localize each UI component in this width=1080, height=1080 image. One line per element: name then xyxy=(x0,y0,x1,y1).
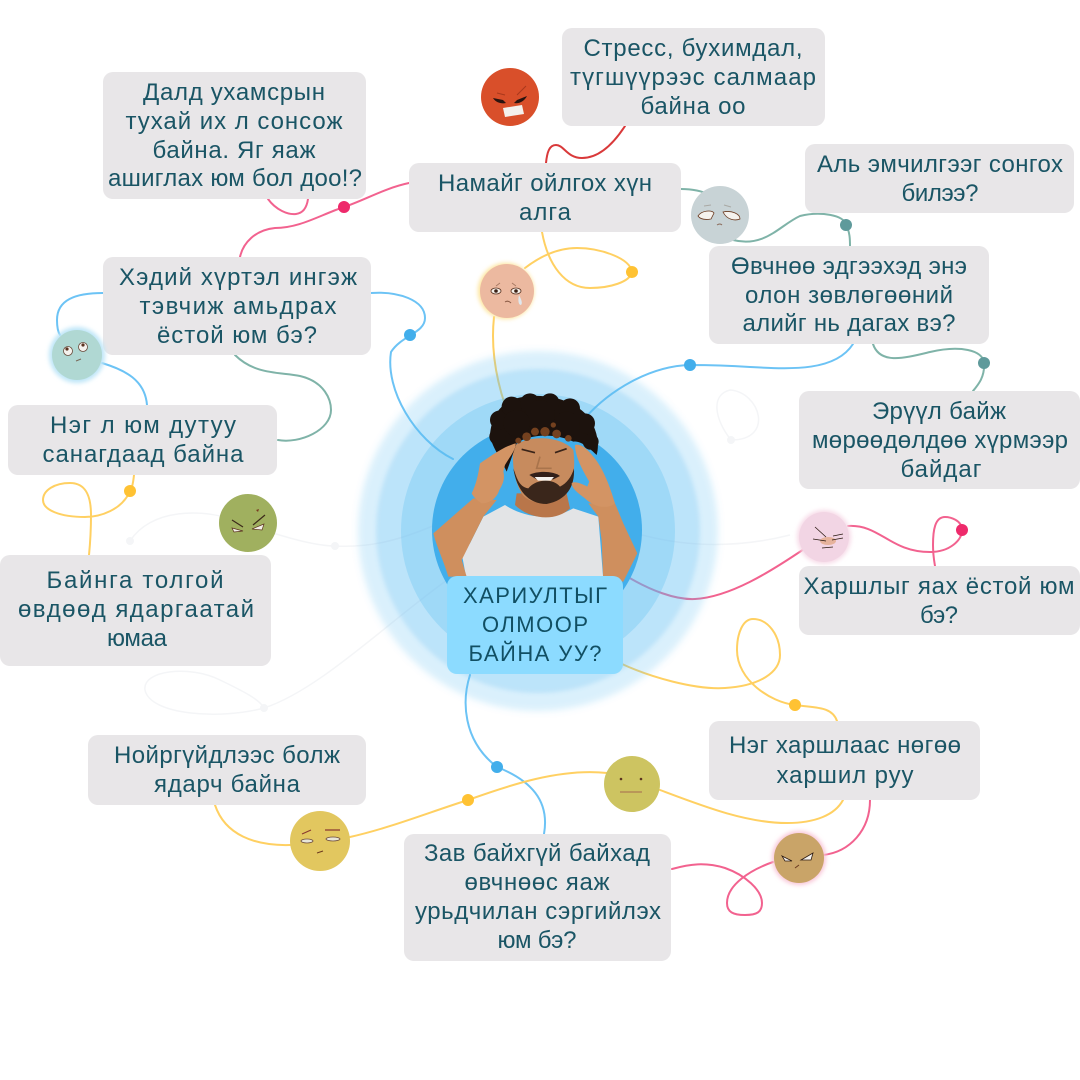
box: what to do about allergy: Харшлыг яах ёстой юм xyxy=(804,573,1074,600)
box: which advice: Өвчнөө эдгээхэд энэ xyxy=(731,253,967,280)
connector: yellow, center to stress chain xyxy=(622,619,837,721)
icon: pink squinting face xyxy=(797,510,851,564)
box: which treatment xyxy=(805,144,1074,213)
box: subconscious xyxy=(103,72,366,199)
connector: teal, understanding to treatment xyxy=(681,189,852,246)
box: how long to endure: Хэдий хүртэл ингэж xyxy=(119,264,357,291)
left hand xyxy=(472,443,516,503)
box: subconscious: байна. Яг яаж xyxy=(152,137,316,164)
box: allergy to allergy: Нэг харшлаас нөгөө xyxy=(729,732,961,759)
box: stress xyxy=(562,28,825,126)
box: which advice xyxy=(709,246,989,344)
icon: tan grumpy face xyxy=(772,831,826,885)
box: headaches: өвдөөд ядаргаатай xyxy=(18,596,254,623)
right arm xyxy=(588,503,637,582)
box: prevention: Зав байхгүй байхад xyxy=(424,840,650,867)
curly hair xyxy=(489,393,599,472)
box: headaches xyxy=(0,555,271,666)
box: how long to endure xyxy=(103,257,371,355)
box: which advice: олон зөвлөгөөний xyxy=(745,282,953,309)
t-shirt xyxy=(462,505,603,580)
box: prevention xyxy=(404,834,671,961)
icon: neutral olive face xyxy=(604,756,660,812)
connector: pink, center to stress question xyxy=(628,517,968,599)
box: prevention: юм бэ? xyxy=(498,927,576,954)
nose xyxy=(537,457,552,468)
hair highlights xyxy=(515,422,572,444)
box: healthy dreams xyxy=(799,391,1080,489)
right hand xyxy=(572,445,615,507)
connector: pink, stress chain to prevention xyxy=(672,800,870,915)
box: stress: байна оо xyxy=(640,93,746,120)
box: nobody understands: Намайг ойлгох хүн xyxy=(438,170,652,197)
box: which treatment: билээ? xyxy=(902,180,978,207)
box: prevention: өвчнөөс яаж xyxy=(464,869,610,896)
icon: tired yellow face xyxy=(290,811,350,871)
box: allergy to allergy xyxy=(709,721,980,800)
icon: sad gray face xyxy=(691,186,749,244)
faint background connectors xyxy=(126,390,790,714)
box: subconscious: тухай их л сонсож xyxy=(126,108,342,135)
neck xyxy=(515,493,570,517)
center question box: БАЙНА УУ? xyxy=(468,641,602,666)
box: what to do about allergy xyxy=(799,566,1080,635)
box: something missing: санагдаад байна xyxy=(42,441,244,468)
left arm xyxy=(433,498,497,577)
box: insomnia: ядарч байна xyxy=(154,771,301,798)
icon: annoyed green face xyxy=(219,494,277,552)
box: nobody understands: алга xyxy=(519,199,572,226)
icon: angry red face xyxy=(481,68,539,126)
connector: teal, endure to missing xyxy=(235,355,331,441)
face xyxy=(513,438,574,503)
box: something missing: Нэг л юм дутуу xyxy=(50,412,236,439)
box: which treatment: Аль эмчилгээг сонгох xyxy=(817,151,1063,178)
connector: blue, endure to center xyxy=(371,293,453,459)
box: headaches: Байнга толгой xyxy=(46,567,224,594)
box: stress: түгшүүрээс салмаар xyxy=(570,64,816,91)
center question box xyxy=(447,576,623,674)
box: subconscious: ашиглах юм бол доо!? xyxy=(108,165,362,192)
box: something missing xyxy=(8,405,277,475)
connector: pink, subconscious to understanding xyxy=(240,183,409,257)
connector: blue, endure to missing via face xyxy=(57,293,147,405)
connector: red, stress to understanding xyxy=(546,126,625,163)
center question box: ХАРИУЛТЫГ xyxy=(463,583,607,608)
center question box: ОЛМООР xyxy=(482,612,588,637)
box: insomnia: Нойргүйдлээс болж xyxy=(114,742,340,769)
box: what to do about allergy: бэ? xyxy=(920,602,958,629)
box: subconscious: Далд ухамсрын xyxy=(143,79,325,106)
icon: crying peach face xyxy=(478,263,534,319)
moustache and teeth xyxy=(529,472,560,479)
box: healthy dreams: мөрөөдөлдөө хүрмээр xyxy=(812,427,1068,454)
blue disc behind portrait xyxy=(432,425,642,635)
closed eyes xyxy=(522,449,567,453)
box: insomnia xyxy=(88,735,366,805)
connector: yellow, understanding to crying face xyxy=(493,232,638,405)
beard xyxy=(513,468,574,504)
box: which advice: алийг нь дагах вэ? xyxy=(742,310,956,337)
box: headaches: юмаа xyxy=(107,625,168,652)
connector: yellow, missing to headache xyxy=(43,475,136,555)
box: stress: Стресс, бухимдал, xyxy=(584,35,802,62)
box: how long to endure: ёстой юм бэ? xyxy=(157,322,317,349)
portrait: man with headache xyxy=(433,393,637,582)
box: healthy dreams: байдаг xyxy=(900,456,982,483)
box: healthy dreams: Эрүүл байж xyxy=(872,398,1006,425)
box: how long to endure: тэвчиж амьдрах xyxy=(140,293,336,320)
connector: blue, center to prevention xyxy=(466,675,545,834)
connector: yellow, insomnia to stress chain xyxy=(215,772,843,845)
box: prevention: урьдчилан сэргийлэх xyxy=(415,898,661,925)
icon: rolling eyes face xyxy=(49,327,105,383)
connector: blue, advice to center xyxy=(585,344,853,418)
box: nobody understands xyxy=(409,163,681,232)
box: allergy to allergy: харшил руу xyxy=(776,762,914,789)
central glowing rings xyxy=(358,351,718,711)
connector: teal, advice to dreams xyxy=(873,344,990,391)
